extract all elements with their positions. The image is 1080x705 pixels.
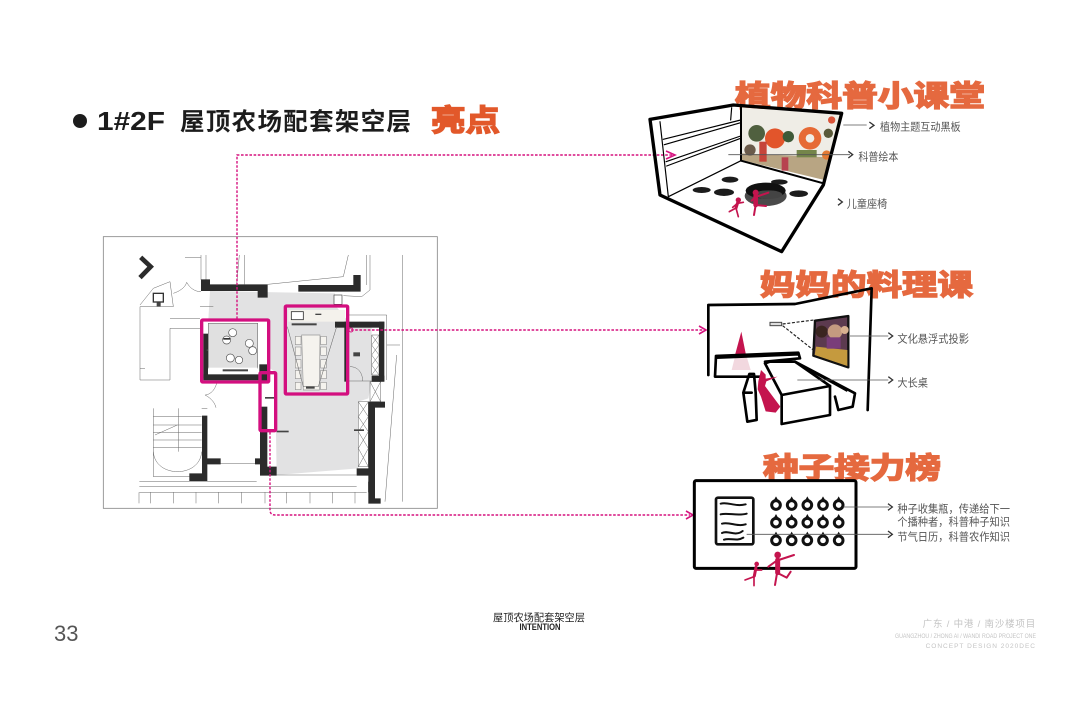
calendar panel [716, 498, 753, 544]
floor plan [103, 237, 437, 508]
bench behind table [715, 353, 800, 377]
plan frame [103, 237, 437, 508]
leader lines [728, 122, 874, 205]
caption English: INTENTION [520, 622, 560, 632]
heading: seed relay board: 种子接力榜 [763, 452, 941, 485]
title text: 1#2F [97, 106, 165, 136]
wall outline [708, 288, 872, 410]
long table in plan [287, 312, 337, 390]
projection screen [813, 316, 849, 367]
project name English: GUANGZHOU / ZHONG AI / WANDI ROAD PROJECT ONE [895, 633, 1037, 640]
scene: cooking class [708, 288, 969, 424]
thin plan lines [139, 255, 402, 503]
label: next seed sower: 个播种者，科普种子知识 [897, 515, 1010, 529]
label: seed collection bottles: 种子收集瓶，传递给下一 [897, 501, 1010, 515]
title bullet [73, 114, 87, 128]
design stage: CONCEPT DESIGN 2020DEC [926, 643, 1036, 650]
children figures [745, 552, 794, 586]
caption Chinese: 屋顶农场配套架空层 [493, 611, 585, 624]
leader lines [797, 333, 893, 383]
label: science books: 科普绘本 [858, 149, 898, 163]
highlight word: 亮点 [431, 105, 500, 138]
title: 1#2F rooftop farm highlights [73, 105, 500, 138]
title text Chinese: 屋顶农场配套架空层 [180, 108, 411, 136]
scene: seed relay board [694, 481, 1010, 586]
label: long table: 大长桌 [897, 375, 928, 389]
label: interactive blackboard: 植物主题互动黑板 [880, 119, 961, 133]
central planter seat [745, 183, 787, 206]
board outline [694, 481, 856, 568]
dashed connector to cooking class [349, 326, 706, 334]
projector and beams [770, 320, 814, 350]
bottle necks [773, 496, 842, 537]
footer center caption [493, 611, 585, 632]
white counter [288, 310, 345, 322]
heading: plant science classroom: 植物科普小课堂 [735, 80, 985, 113]
project name: 广东 / 中港 / 南沙楼项目 [923, 618, 1036, 630]
seated figure [758, 370, 780, 413]
scene: plant science classroom [650, 105, 961, 252]
dashed connector to seed relay board [270, 432, 693, 519]
page number: 33 [54, 621, 78, 646]
standing figure with reflection [732, 332, 751, 370]
leader lines [747, 504, 892, 538]
floor seats [693, 177, 808, 197]
label: solar-term calendar: 节气日历，科普农作知识 [897, 530, 1010, 544]
bookshelf lines [660, 108, 741, 197]
plan walls [140, 257, 385, 504]
footer project info [895, 618, 1037, 650]
blackboard photo [741, 107, 840, 180]
dashed connector to plant classroom [237, 151, 675, 319]
front stool [743, 374, 757, 422]
seed bottle grid [772, 501, 843, 545]
left room fixtures and stools [203, 323, 258, 373]
label: children seats: 儿童座椅 [847, 196, 887, 210]
table [765, 362, 855, 424]
label: immersive projection: 文化悬浮式投影 [897, 331, 969, 345]
room outline [650, 105, 842, 252]
children figures [729, 190, 768, 217]
gray floor area [208, 291, 372, 475]
small plan fixtures [153, 293, 364, 432]
magenta highlight boxes [202, 306, 348, 431]
heading: mother's cooking class: 妈妈的料理课 [760, 269, 973, 302]
